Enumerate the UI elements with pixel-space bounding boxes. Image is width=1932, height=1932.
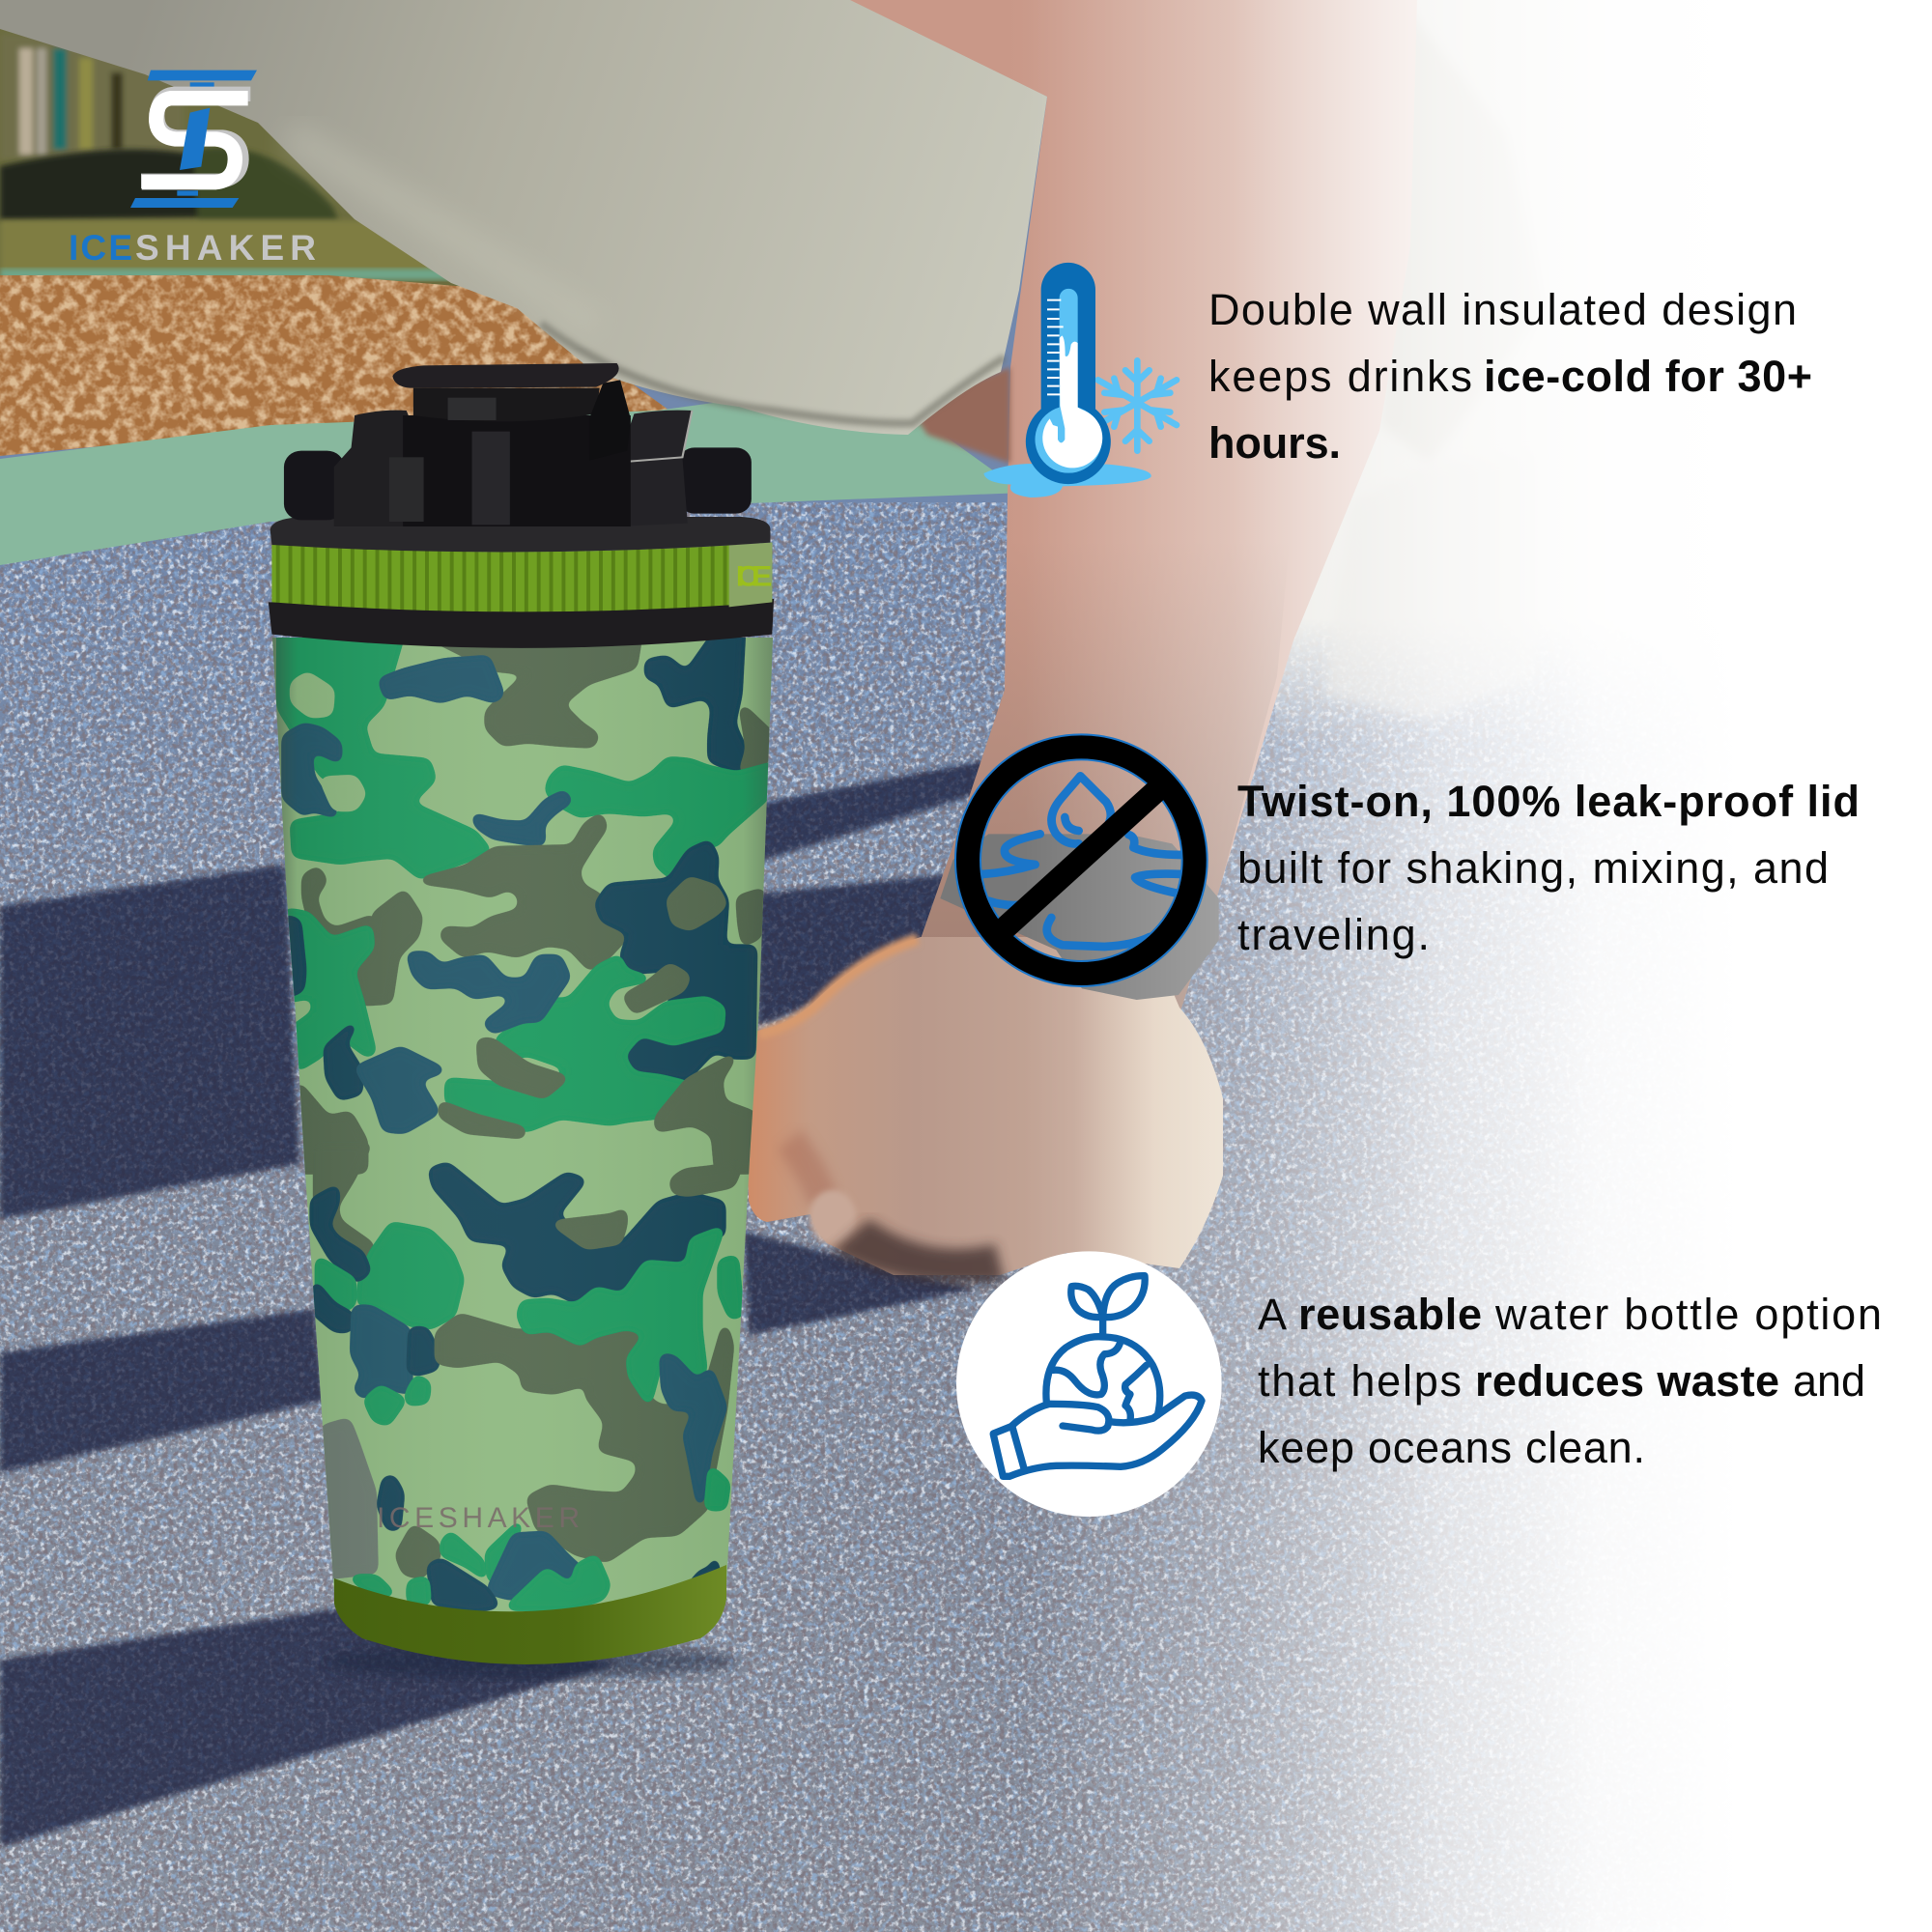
text block: reusable bottle: A bbox=[1258, 1290, 1287, 1339]
logo: Iceshaker: SHAKER bbox=[135, 228, 316, 268]
shadow bands on ground bbox=[0, 758, 1000, 1847]
icon: hand holding earth bbox=[956, 1251, 1222, 1517]
prohibition slash bbox=[993, 781, 1167, 939]
logo mark bbox=[130, 71, 257, 208]
text block: reusable bottle: water bottle option bbox=[1494, 1290, 1882, 1339]
text block: reusable bottle: reduces waste bbox=[1475, 1356, 1779, 1406]
thermometer body bbox=[1026, 263, 1111, 484]
engraved logo on bottle: ICESHAKER bbox=[377, 1502, 580, 1534]
bottle body with camo pattern bbox=[261, 624, 782, 1652]
fingers bbox=[778, 1130, 838, 1208]
hand highlight along top edge bbox=[759, 939, 918, 1034]
text block: reusable bottle: that helps bbox=[1258, 1356, 1462, 1406]
background: pale distance behind arm bbox=[1275, 0, 1932, 744]
background: kneeling leg and shoe, faded bbox=[1323, 0, 1546, 720]
text block: insulated design bbox=[1208, 285, 1812, 468]
icon: no leaking sign bbox=[968, 747, 1195, 974]
dark upper-arm shadow bbox=[908, 367, 1010, 464]
hand bbox=[748, 937, 1223, 1275]
spout bbox=[403, 415, 631, 526]
bottle lid: ICE bbox=[736, 560, 772, 592]
fence bbox=[0, 34, 184, 159]
ticks bbox=[1047, 300, 1064, 394]
text block: reusable bottle bbox=[1258, 1290, 1882, 1472]
text block: insulated design: ice-cold for 30+ bbox=[1484, 352, 1812, 401]
figure: shirt bbox=[0, 0, 1047, 435]
logo wordmark: ICE bbox=[69, 228, 132, 268]
watch under icon bbox=[940, 834, 1219, 1000]
icon: melting thermometer with snowflake bbox=[983, 263, 1177, 497]
snowflake bbox=[1098, 360, 1177, 451]
logo: Iceshaker bbox=[69, 71, 316, 268]
bottle bbox=[261, 363, 782, 1679]
text block: reusable bottle: and bbox=[1793, 1356, 1865, 1406]
camo lower half bbox=[314, 1146, 740, 1608]
text block: reusable bottle: keep oceans clean. bbox=[1258, 1423, 1645, 1472]
text block: reusable bottle: reusable bbox=[1298, 1290, 1482, 1339]
water drop and splash strokes bbox=[982, 776, 1181, 947]
white fade overlay bbox=[966, 0, 1932, 1932]
text block: insulated design: hours. bbox=[1208, 418, 1341, 468]
lid knobs bbox=[284, 451, 344, 520]
text block: insulated design: Double wall insulated design bbox=[1208, 285, 1797, 334]
bottle lid bbox=[269, 363, 774, 648]
bottle shading bbox=[261, 638, 782, 1652]
hedge bbox=[0, 147, 338, 220]
text block: insulated design: keeps drinks bbox=[1208, 352, 1472, 401]
background: park track, mulch and hedge bbox=[0, 0, 1024, 565]
green track bbox=[0, 382, 1024, 565]
text block: leak-proof lid: built for shaking, mixing, and bbox=[1237, 843, 1829, 893]
text block: leak-proof lid: Twist-on, 100% leak-proof lid bbox=[1237, 777, 1860, 826]
mulch bbox=[0, 275, 668, 456]
text block: leak-proof lid: traveling. bbox=[1237, 910, 1430, 959]
figure: forearm bbox=[748, 0, 1417, 1285]
prohibition ring bbox=[968, 747, 1195, 974]
camo upper half bbox=[281, 624, 773, 1170]
bottle base band bbox=[334, 1565, 726, 1664]
puddle bbox=[983, 464, 1151, 497]
bottle ground shadow bbox=[324, 1644, 739, 1679]
text block: leak-proof lid bbox=[1237, 777, 1860, 959]
